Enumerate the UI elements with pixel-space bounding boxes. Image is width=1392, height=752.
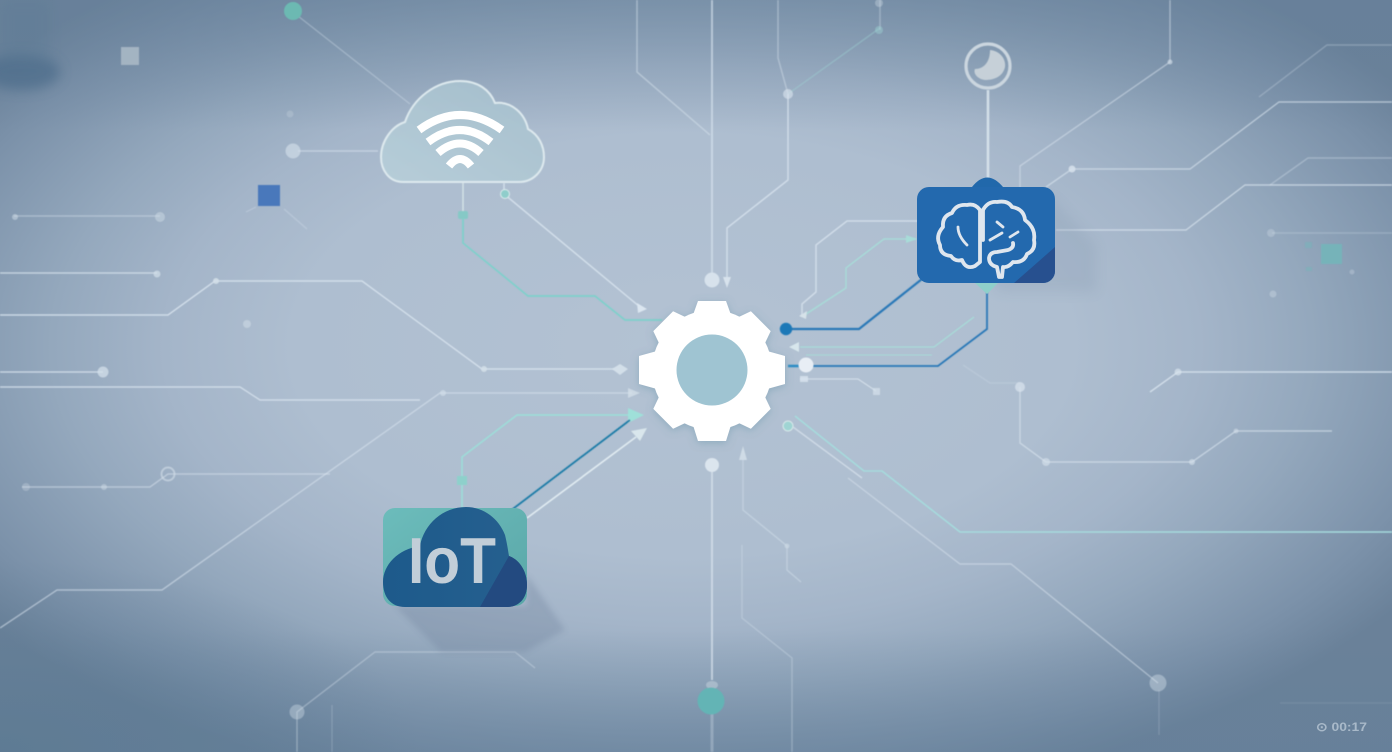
circuit nodes: right side bbox=[1015, 60, 1354, 692]
icon: wifi cloud bbox=[381, 81, 544, 182]
icon: brain card bbox=[917, 178, 1096, 294]
connector markers: brain bbox=[780, 235, 917, 395]
icon: IoT cloud card bbox=[383, 507, 565, 652]
circuit lines: bottom bbox=[712, 427, 862, 752]
icon: pin above brain card bbox=[966, 44, 1010, 88]
icon: gear bbox=[639, 301, 785, 441]
teal circuit line: lower right bbox=[795, 416, 1392, 532]
circuit lines: left side bbox=[0, 16, 632, 752]
IoT label: IoT bbox=[408, 524, 496, 597]
decorative squares bbox=[121, 47, 1342, 271]
timestamp watermark: ⊙ 00:17 bbox=[1316, 720, 1367, 734]
cloud connector lines bbox=[458, 182, 662, 320]
brain connector lines bbox=[788, 90, 988, 391]
circuit nodes: bottom bbox=[698, 421, 793, 714]
IoT connector lines bbox=[457, 408, 647, 521]
circuit lines: top bbox=[637, 0, 880, 280]
circuit lines: right side bbox=[848, 0, 1392, 735]
circuit nodes: top bbox=[704, 0, 883, 288]
icon: brain outline bbox=[938, 202, 1034, 277]
circuit nodes: left side bbox=[12, 2, 640, 720]
icon: wifi arcs bbox=[419, 115, 502, 166]
